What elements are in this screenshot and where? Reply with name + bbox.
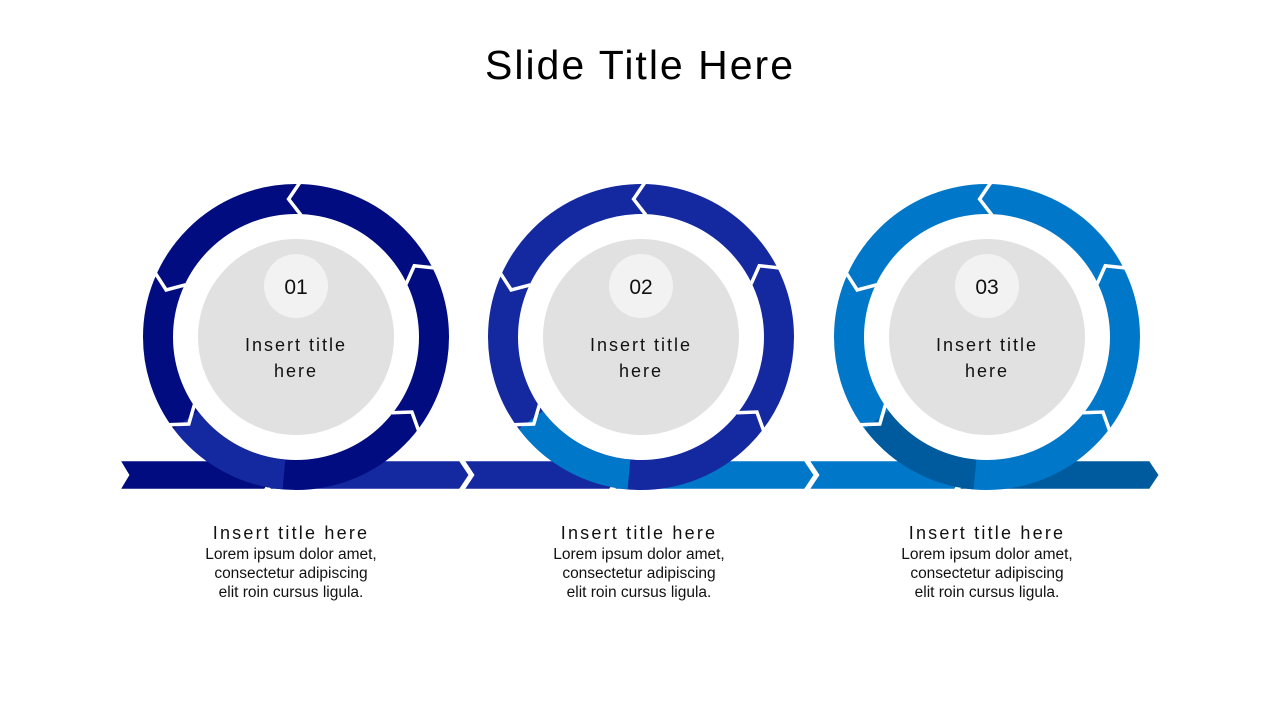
- caption 2: Insert title here: [561, 523, 717, 543]
- chevron bar: [119, 460, 1160, 490]
- caption 3: consectetur adipiscing: [910, 565, 1064, 582]
- ring 2: [491, 182, 791, 487]
- caption 2: consectetur adipiscing: [562, 565, 716, 582]
- caption 2: Lorem ipsum dolor amet,: [553, 546, 725, 563]
- circle labels: 03: [975, 276, 999, 299]
- caption 1: elit roin cursus ligula.: [219, 584, 363, 601]
- circle labels: here: [274, 361, 318, 381]
- title: Slide Title Here: [485, 42, 795, 88]
- circle labels: here: [619, 361, 663, 381]
- caption 1: consectetur adipiscing: [214, 565, 368, 582]
- caption 3: Insert title here: [909, 523, 1065, 543]
- ring 1: [146, 182, 446, 487]
- caption 3: [901, 523, 1073, 601]
- circle labels: Insert title: [590, 335, 692, 355]
- ring 3: [837, 182, 1137, 487]
- caption 3: Lorem ipsum dolor amet,: [901, 546, 1073, 563]
- caption 1: Insert title here: [213, 523, 369, 543]
- circle labels: Insert title: [936, 335, 1038, 355]
- circle labels: [245, 276, 1038, 381]
- circle labels: Insert title: [245, 335, 347, 355]
- caption 2: [553, 523, 725, 601]
- caption 1: Lorem ipsum dolor amet,: [205, 546, 377, 563]
- circle labels: 01: [284, 276, 308, 299]
- caption 2: elit roin cursus ligula.: [567, 584, 711, 601]
- circle labels: here: [965, 361, 1009, 381]
- circle labels: 02: [629, 276, 653, 299]
- caption 3: elit roin cursus ligula.: [915, 584, 1059, 601]
- caption 1: [205, 523, 377, 601]
